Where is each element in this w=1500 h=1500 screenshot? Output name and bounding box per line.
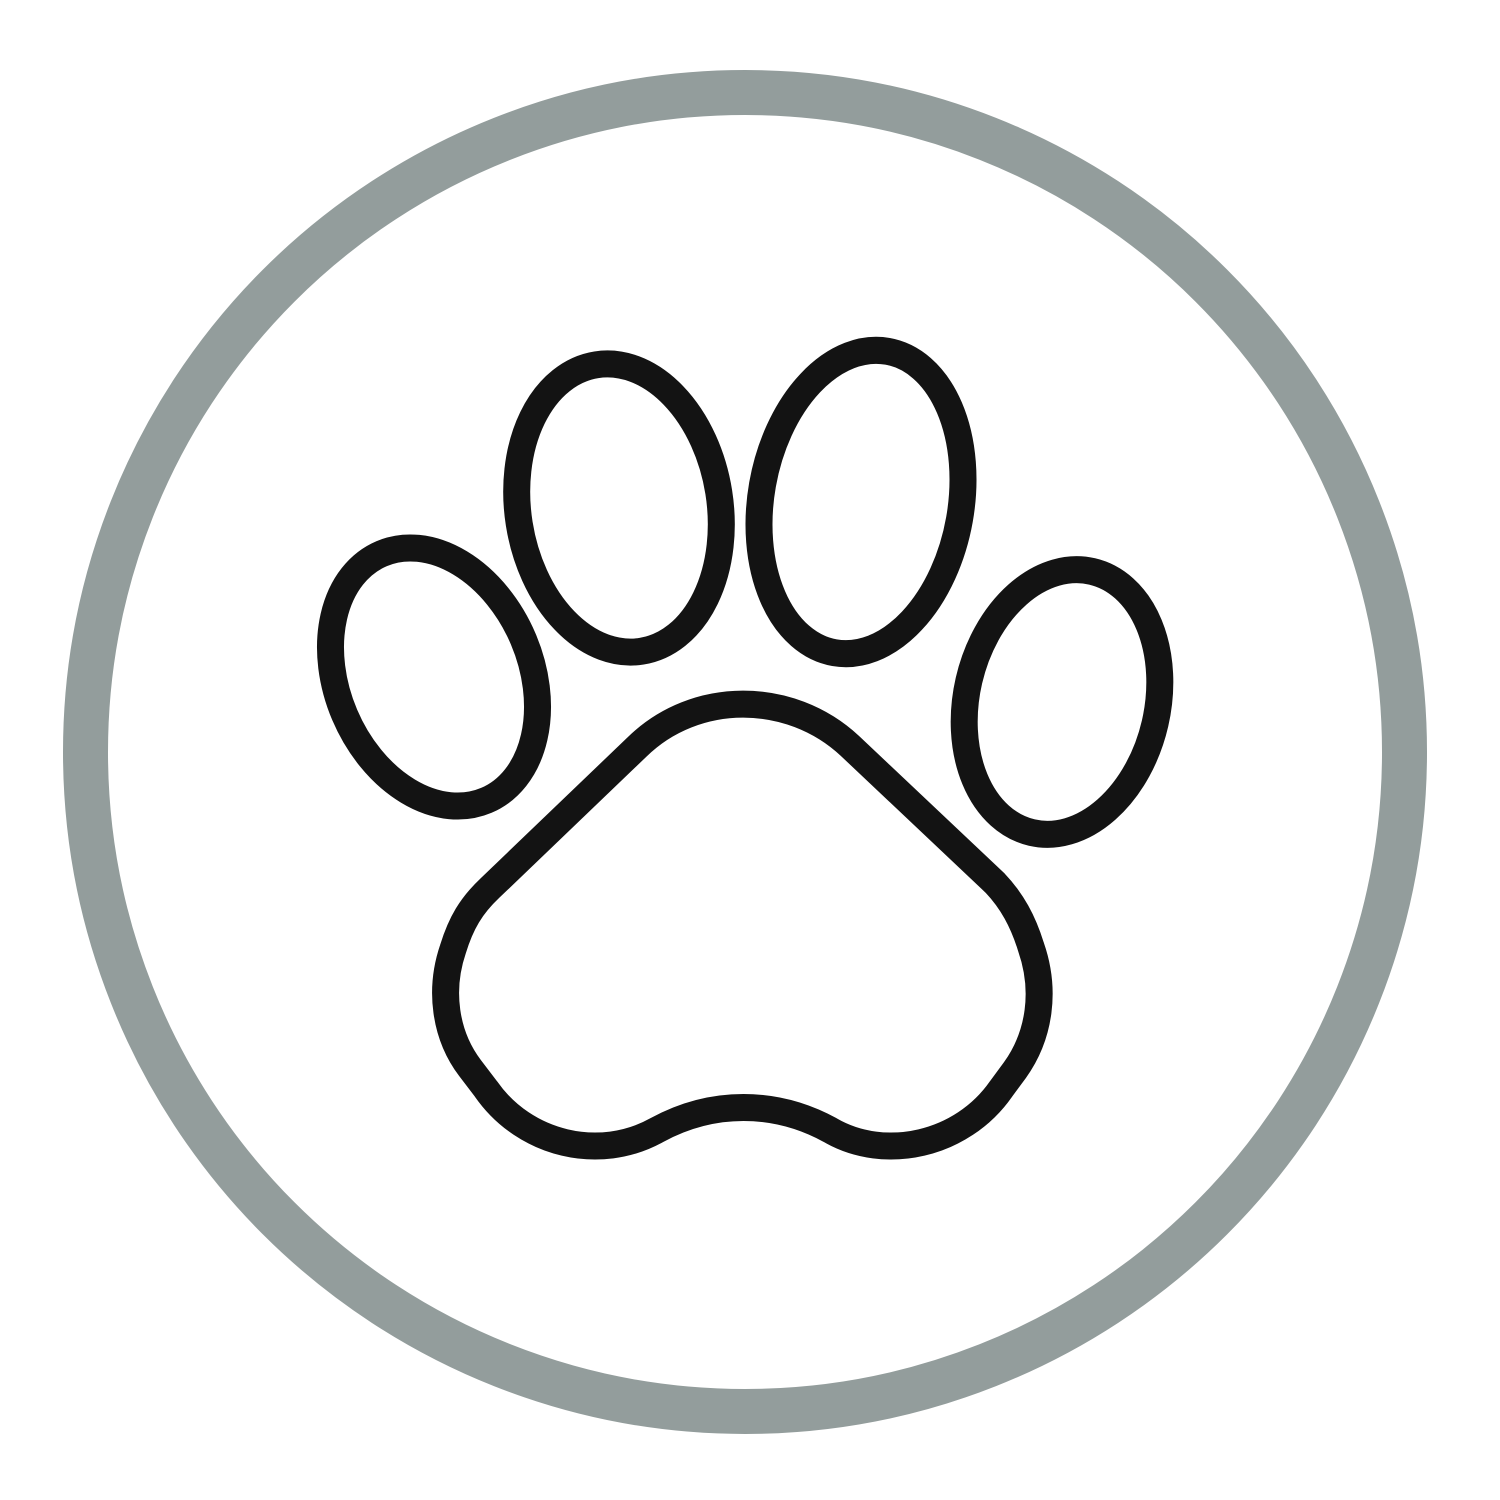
main pad: [446, 704, 1039, 1146]
toe: far left: [292, 516, 576, 838]
toe: far right: [939, 550, 1185, 854]
toe: inner left: [497, 349, 741, 667]
grey outer ring: [86, 92, 1404, 1412]
paw print: [292, 334, 1185, 1146]
toe: inner right: [736, 334, 986, 670]
